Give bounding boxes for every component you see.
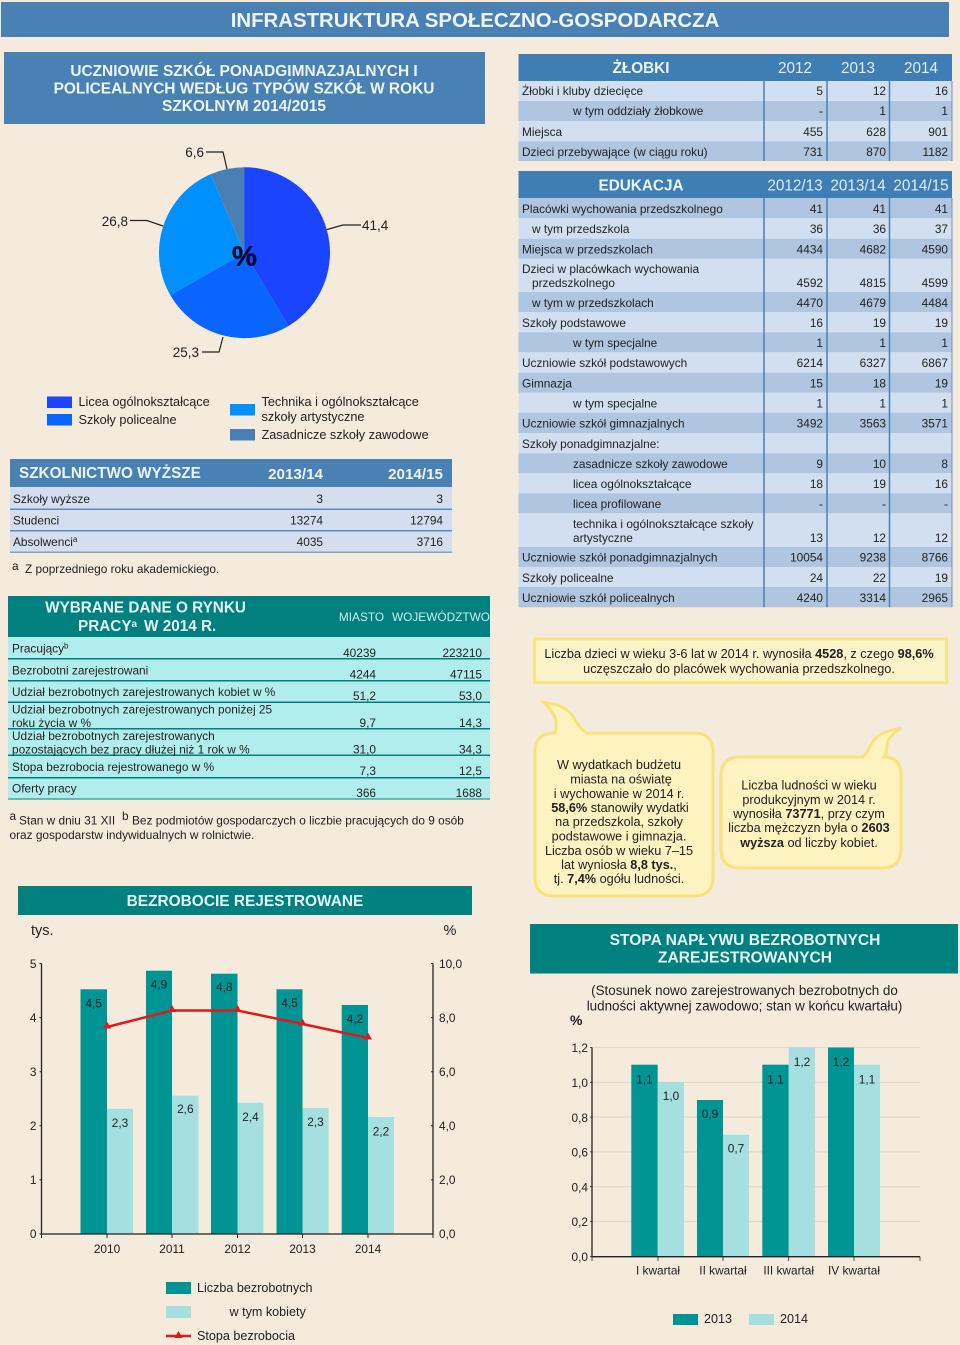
table: edukacja: zasadnicze szkoły zawodowe xyxy=(573,457,728,471)
table: edukacja: 6327 xyxy=(860,356,886,370)
chart: stopa napływu: 0,6 xyxy=(572,1146,588,1160)
table: edukacja: 4470 xyxy=(797,296,823,310)
table: edukacja: 1 xyxy=(816,396,823,410)
table: szkolnictwo wyższe: 3 xyxy=(316,492,323,506)
callout bubble: ludność w wieku produkcyjnym: wynosiła 73771, przy czym xyxy=(732,807,885,821)
table: żłobki xyxy=(518,54,952,161)
table: żłobki: 628 xyxy=(866,125,886,139)
footnote: szkolnictwo wyższe: a xyxy=(12,559,19,573)
table: szkolnictwo wyższe: 4035 xyxy=(297,535,323,549)
table: edukacja: 36 xyxy=(810,222,823,236)
table: edukacja: 18 xyxy=(810,477,823,491)
table: rynek pracy: 31,0 xyxy=(353,742,376,756)
chart: stopa napływu: I kwartał xyxy=(636,1264,680,1278)
table: żłobki: 5 xyxy=(816,84,823,98)
chart: bezrobocie rejestrowane: 2012 xyxy=(224,1242,251,1256)
chart: bezrobocie rejestrowane: 1 xyxy=(30,1173,37,1187)
table: edukacja: 18 xyxy=(873,376,886,390)
callout bubble: wydatki budżetu: na przedszkola, szkoły xyxy=(555,815,683,829)
table: edukacja: 2013/14 xyxy=(830,178,886,194)
table: żłobki: - xyxy=(819,104,823,118)
callout bubble: ludność w wieku produkcyjnym: produkcyjnym w 2014 r. xyxy=(742,793,876,807)
pie chart: typy szkół: 25,3 xyxy=(173,345,199,360)
table: edukacja: 9238 xyxy=(860,550,886,564)
callout bubble: ludność w wieku produkcyjnym: liczba mężczyzn była o 2603 xyxy=(728,821,890,835)
table: edukacja: 37 xyxy=(935,222,948,236)
heading: stopa napływu bezrobotnych xyxy=(530,924,958,974)
table: edukacja xyxy=(518,171,952,607)
legend: bezrobocie: Stopa bezrobocia xyxy=(197,1329,295,1343)
table: szkolnictwo wyższe: 3 xyxy=(436,492,443,506)
table: edukacja: 8 xyxy=(941,457,948,471)
table: rynek pracy: WYBRANE DANE O RYNKU xyxy=(45,600,246,616)
legend: bezrobocie: w tym kobiety xyxy=(228,1305,306,1319)
table: żłobki: 2014 xyxy=(904,60,939,77)
table: edukacja: 1 xyxy=(879,336,886,350)
chart: bezrobocie rejestrowane: 2,3 xyxy=(307,1115,324,1129)
table: edukacja: EDUKACJA xyxy=(598,178,684,194)
table: edukacja: 36 xyxy=(873,222,886,236)
table: edukacja: 6867 xyxy=(922,356,948,370)
callout bubble: wydatki budżetu: Liczba osób w wieku 7–15 xyxy=(545,844,693,858)
table: edukacja: 15 xyxy=(810,376,823,390)
table: rynek pracy: 51,2 xyxy=(353,689,376,703)
callout: liczba dzieci xyxy=(534,639,946,682)
table: edukacja: 3571 xyxy=(922,416,948,430)
legend: stopa napływu xyxy=(673,1312,808,1326)
chart: bezrobocie rejestrowane: 8,0 xyxy=(439,1011,456,1025)
table: edukacja: przedszkolnego xyxy=(532,276,615,290)
chart: bezrobocie rejestrowane: 3 xyxy=(30,1065,37,1079)
table: rynek pracy: 34,3 xyxy=(459,742,482,756)
table: edukacja: 6214 xyxy=(797,356,823,370)
table: żłobki: 870 xyxy=(866,145,886,159)
table: edukacja: 41 xyxy=(810,202,823,216)
table: rynek pracy: 40239 xyxy=(343,646,376,660)
footnote: rynek pracy: oraz gospodarstw indywidualnych w rolnictwie. xyxy=(10,828,254,842)
chart: stopa napływu: 1,1 xyxy=(859,1072,876,1086)
table: żłobki: 1 xyxy=(941,104,948,118)
table: edukacja: 41 xyxy=(935,202,948,216)
table: żłobki: Miejsca xyxy=(522,125,563,139)
table: edukacja: licea ogólnokształcące xyxy=(573,477,692,491)
table: edukacja: 4599 xyxy=(922,276,948,290)
table: edukacja: 1 xyxy=(879,396,886,410)
chart: stopa napływu: 1,2 xyxy=(794,1055,810,1069)
table: rynek pracy: b xyxy=(64,642,69,650)
chart: bezrobocie rejestrowane: 2013 xyxy=(289,1242,316,1256)
table: edukacja: - xyxy=(944,497,948,511)
footnote: rynek pracy xyxy=(10,809,464,842)
table: edukacja: 1 xyxy=(941,336,948,350)
table: edukacja: 4484 xyxy=(922,296,948,310)
table: edukacja: 2014/15 xyxy=(893,178,949,194)
table: edukacja: 22 xyxy=(873,571,886,585)
chart: stopa napływu: 0,8 xyxy=(572,1111,588,1125)
subtitle: stopa napływu xyxy=(587,983,902,1014)
subtitle: stopa napływu: ludności aktywnej zawodowo; stan w końcu kwartału) xyxy=(587,998,902,1014)
table: edukacja: Gimnazja xyxy=(522,376,572,390)
table: rynek pracy: Udział bezrobotnych zarejestrowanych kobiet w % xyxy=(12,685,276,699)
pie chart: typy szkół: 26,8 xyxy=(102,214,128,229)
table: edukacja: 3314 xyxy=(860,591,886,605)
panel: heading uczniowie szkół xyxy=(4,52,485,124)
table: edukacja: 19 xyxy=(873,316,886,330)
table: edukacja: 10054 xyxy=(790,550,823,564)
chart: stopa napływu: III kwartał xyxy=(763,1264,814,1278)
legend: typy szkół: szkoły artystyczne xyxy=(262,410,364,424)
chart: stopa napływu xyxy=(570,1012,920,1278)
footnote: rynek pracy: a xyxy=(10,809,16,823)
chart: bezrobocie rejestrowane: 2014 xyxy=(355,1242,382,1256)
table: rynek pracy: a xyxy=(132,619,138,630)
table: szkolnictwo wyższe: 13274 xyxy=(290,514,323,528)
table: rynek pracy: W 2014 R. xyxy=(144,618,216,635)
chart: stopa napływu: % xyxy=(570,1012,583,1028)
table: edukacja: 8766 xyxy=(922,550,948,564)
callout bubble: ludność w wieku produkcyjnym xyxy=(721,728,901,868)
table: edukacja: 24 xyxy=(810,571,823,585)
table: edukacja: - xyxy=(819,497,823,511)
chart: bezrobocie rejestrowane: 4,5 xyxy=(85,996,102,1010)
table: edukacja: Miejsca w przedszkolach xyxy=(522,242,653,256)
chart: bezrobocie rejestrowane: 2,4 xyxy=(242,1110,259,1124)
chart: bezrobocie rejestrowane: % xyxy=(444,923,457,939)
chart: stopa napływu: 1,2 xyxy=(572,1041,588,1055)
chart: bezrobocie rejestrowane: 10,0 xyxy=(439,957,462,971)
chart: stopa napływu: 0,0 xyxy=(572,1250,588,1264)
table: edukacja: Placówki wychowania przedszkolnego xyxy=(522,202,723,216)
table: rynek pracy: 7,3 xyxy=(360,764,376,778)
table: żłobki: 1182 xyxy=(923,145,948,159)
pie chart: typy szkół: 41,4 xyxy=(362,218,389,233)
chart: bezrobocie rejestrowane: tys. xyxy=(31,923,54,939)
table: rynek pracy xyxy=(8,596,490,800)
table: edukacja: 4592 xyxy=(797,276,823,290)
pie chart: typy szkół xyxy=(102,145,389,360)
chart: stopa napływu: 0,7 xyxy=(728,1142,744,1156)
callout bubble: wydatki budżetu: W wydatkach budżetu xyxy=(557,758,681,772)
chart: bezrobocie rejestrowane: 0 xyxy=(30,1227,37,1241)
table: rynek pracy: Udział bezrobotnych zarejestrowanych poniżej 25 xyxy=(12,702,272,716)
table: szkolnictwo wyższe: 2013/14 xyxy=(268,466,324,483)
table: rynek pracy: Pracujący xyxy=(12,642,64,656)
table: edukacja: technika i ogólnokształcące szkoły xyxy=(573,517,753,531)
table: rynek pracy: 47115 xyxy=(450,668,482,682)
heading: stopa napływu bezrobotnych: ZAREJESTROWANYCH xyxy=(658,950,832,966)
table: edukacja: 16 xyxy=(810,316,823,330)
title xyxy=(1,2,949,37)
table: rynek pracy: 223210 xyxy=(442,646,482,660)
table: edukacja: w tym przedszkola xyxy=(531,222,630,236)
table: edukacja: Uczniowie szkół podstawowych xyxy=(522,356,687,370)
callout bubble: wydatki budżetu: lat wyniosła 8,8 tys., xyxy=(561,858,677,872)
table: edukacja: 2965 xyxy=(922,591,948,605)
table: rynek pracy: roku życia w % xyxy=(12,716,91,730)
table: rynek pracy: 53,0 xyxy=(459,689,482,703)
chart: stopa napływu: 1,1 xyxy=(767,1072,784,1086)
footnote: rynek pracy: Stan w dniu 31 XII xyxy=(19,814,115,828)
callout: liczba dzieci: Liczba dzieci w wieku 3-6 lat w 2014 r. wynosiła 4528, z czego 98,6% xyxy=(544,647,934,661)
table: rynek pracy: PRACY xyxy=(78,618,132,635)
table: żłobki: Żłobki i kluby dziecięce xyxy=(522,84,644,98)
legend: typy szkół: Licea ogólnokształcące xyxy=(78,395,210,409)
table: edukacja: 2012/13 xyxy=(767,178,823,194)
legend: bezrobocie: Liczba bezrobotnych xyxy=(197,1281,313,1295)
table: edukacja: 4240 xyxy=(797,591,823,605)
table: edukacja: w tym specjalne xyxy=(572,336,658,350)
table: edukacja: - xyxy=(882,497,886,511)
chart: bezrobocie rejestrowane xyxy=(30,923,462,1256)
table: rynek pracy: 12,5 xyxy=(459,764,482,778)
table: edukacja: 1 xyxy=(816,336,823,350)
table: żłobki: w tym oddziały żłobkowe xyxy=(572,104,704,118)
legend: stopa napływu: 2014 xyxy=(780,1312,808,1326)
table: rynek pracy: Udział bezrobotnych zarejestrowanych xyxy=(12,729,215,743)
title: INFRASTRUKTURA SPOŁECZNO-GOSPODARCZA xyxy=(231,10,720,32)
table: edukacja: w tym w przedszkolach xyxy=(531,296,654,310)
table: edukacja: licea profilowane xyxy=(573,497,662,511)
table: szkolnictwo wyższe: Studenci xyxy=(13,514,59,528)
heading: bezrobocie rejestrowane xyxy=(18,886,472,915)
table: rynek pracy: 4244 xyxy=(350,668,376,682)
table: szkolnictwo wyższe: 2014/15 xyxy=(388,466,444,483)
chart: bezrobocie rejestrowane: 5 xyxy=(30,957,37,971)
table: edukacja: 4815 xyxy=(860,276,886,290)
table: rynek pracy: WOJEWÓDZTWO xyxy=(392,609,490,624)
chart: bezrobocie rejestrowane: 2010 xyxy=(94,1242,121,1256)
table: edukacja: Uczniowie szkół policealnych xyxy=(522,591,675,605)
table: rynek pracy: Bezrobotni zarejestrowani xyxy=(12,664,148,678)
panel: heading uczniowie szkół: SZKOLNYM 2014/2015 xyxy=(162,98,326,115)
table: edukacja: 12 xyxy=(935,531,948,545)
chart: stopa napływu: 1,0 xyxy=(663,1089,680,1103)
table: edukacja: 4434 xyxy=(797,242,823,256)
chart: bezrobocie rejestrowane: 4,5 xyxy=(281,996,298,1010)
chart: stopa napływu: 1,1 xyxy=(636,1072,653,1086)
table: edukacja: 19 xyxy=(873,477,886,491)
chart: stopa napływu: IV kwartał xyxy=(828,1264,880,1278)
callout bubble: wydatki budżetu: miasta na oświatę xyxy=(570,772,672,786)
chart: stopa napływu: II kwartał xyxy=(699,1264,747,1278)
table: edukacja: Szkoły ponadgimnazjalne: xyxy=(522,437,660,451)
table: edukacja: 13 xyxy=(810,531,823,545)
table: żłobki: 16 xyxy=(935,84,948,98)
legend: typy szkół xyxy=(47,395,429,442)
chart: stopa napływu: 0,4 xyxy=(572,1180,588,1194)
chart: bezrobocie rejestrowane: 2,3 xyxy=(112,1116,129,1130)
callout bubble: ludność w wieku produkcyjnym: Liczba ludności w wieku xyxy=(741,778,877,792)
table: szkolnictwo wyższe: 3716 xyxy=(417,535,443,549)
subtitle: stopa napływu: (Stosunek nowo zarejestrowanych bezrobotnych do xyxy=(591,983,898,998)
table: edukacja: 9 xyxy=(816,457,823,471)
chart: bezrobocie rejestrowane: 2 xyxy=(30,1119,36,1133)
chart: bezrobocie rejestrowane: 6,0 xyxy=(439,1065,456,1079)
table: rynek pracy: 366 xyxy=(356,786,376,800)
footnote: szkolnictwo wyższe: Z poprzedniego roku akademickiego. xyxy=(25,562,219,576)
table: szkolnictwo wyższe: a xyxy=(73,535,78,544)
table: rynek pracy: 1688 xyxy=(456,786,482,800)
callout bubble: wydatki budżetu: podstawowe i gimnazja. xyxy=(552,830,686,844)
table: edukacja: 4590 xyxy=(922,242,948,256)
table: edukacja: 10 xyxy=(873,457,886,471)
chart: stopa napływu: 1,2 xyxy=(833,1055,849,1069)
table: szkolnictwo wyższe xyxy=(10,459,452,553)
callout bubble: wydatki budżetu: 58,6% stanowiły wydatki xyxy=(551,801,689,815)
table: edukacja: 41 xyxy=(873,202,886,216)
chart: stopa napływu: 1,0 xyxy=(572,1076,588,1090)
table: rynek pracy: pozostających bez pracy dłużej niż 1 rok w % xyxy=(12,742,250,756)
pie chart: typy szkół: % xyxy=(232,240,257,272)
table: rynek pracy: 9,7 xyxy=(360,716,376,730)
chart: bezrobocie rejestrowane: 2,6 xyxy=(177,1102,194,1116)
table: rynek pracy: Stopa bezrobocia rejestrowanego w % xyxy=(12,760,215,774)
table: edukacja: 4679 xyxy=(860,296,886,310)
table: żłobki: 1 xyxy=(879,104,886,118)
table: rynek pracy: MIASTO xyxy=(339,610,384,624)
table: żłobki: 731 xyxy=(803,145,823,159)
table: edukacja: Szkoły podstawowe xyxy=(522,316,626,330)
table: edukacja: Szkoły policealne xyxy=(522,571,614,585)
heading: bezrobocie rejestrowane: BEZROBOCIE REJESTROWANE xyxy=(127,893,363,910)
legend: typy szkół: Szkoły policealne xyxy=(78,413,177,427)
table: edukacja: Uczniowie szkół ponadgimnazjalnych xyxy=(522,550,718,564)
chart: bezrobocie rejestrowane: 2,0 xyxy=(439,1173,456,1187)
table: żłobki: 12 xyxy=(873,84,886,98)
table: edukacja: 19 xyxy=(935,376,948,390)
chart: stopa napływu: 0,2 xyxy=(572,1215,588,1229)
panel: heading uczniowie szkół: UCZNIOWIE SZKÓŁ PONADGIMNAZJALNYCH I xyxy=(70,62,418,80)
table: żłobki: 2013 xyxy=(841,60,875,77)
footnote: rynek pracy: Bez podmiotów gospodarczych o liczbie pracujących do 9 osób xyxy=(132,814,464,828)
chart: bezrobocie rejestrowane: 4 xyxy=(30,1011,37,1025)
legend: typy szkół: Technika i ogólnokształcące xyxy=(262,395,419,409)
footnote: rynek pracy: b xyxy=(122,809,129,823)
panel: heading uczniowie szkół: POLICEALNYCH WEDŁUG TYPÓW SZKÓŁ W ROKU xyxy=(54,80,434,98)
table: szkolnictwo wyższe: SZKOLNICTWO WYŻSZE xyxy=(19,465,201,482)
table: żłobki: 901 xyxy=(928,125,948,139)
table: rynek pracy: 14,3 xyxy=(459,716,482,730)
callout bubble: wydatki budżetu: tj. 7,4% ogółu ludności. xyxy=(554,872,684,886)
table: szkolnictwo wyższe: 12794 xyxy=(410,514,443,528)
pie chart: typy szkół: 6,6 xyxy=(185,145,204,160)
table: żłobki: Dzieci przebywające (w ciągu roku) xyxy=(522,145,708,159)
table: edukacja: 12 xyxy=(873,531,886,545)
chart: bezrobocie rejestrowane: 4,0 xyxy=(439,1119,456,1133)
table: edukacja: w tym specjalne xyxy=(572,396,658,410)
table: żłobki: 455 xyxy=(803,125,823,139)
table: edukacja: 4682 xyxy=(860,242,886,256)
chart: bezrobocie rejestrowane: 4,8 xyxy=(216,980,233,994)
table: szkolnictwo wyższe: Absolwenci xyxy=(13,535,73,549)
table: edukacja: Uczniowie szkół gimnazjalnych xyxy=(522,416,685,430)
table: szkolnictwo wyższe: Szkoły wyższe xyxy=(13,492,90,506)
table: edukacja: 19 xyxy=(935,571,948,585)
table: edukacja: 16 xyxy=(935,477,948,491)
chart: stopa napływu: 0,9 xyxy=(702,1107,719,1121)
table: edukacja: 19 xyxy=(935,316,948,330)
table: edukacja: Dzieci w placówkach wychowania xyxy=(522,262,699,276)
chart: bezrobocie rejestrowane: 0,0 xyxy=(439,1227,456,1241)
chart: bezrobocie rejestrowane: 4,2 xyxy=(347,1012,363,1026)
table: edukacja: 1 xyxy=(941,396,948,410)
legend: stopa napływu: 2013 xyxy=(704,1312,732,1326)
legend: typy szkół: Zasadnicze szkoły zawodowe xyxy=(262,428,429,442)
table: edukacja: 3563 xyxy=(860,416,886,430)
chart: bezrobocie rejestrowane: 2,2 xyxy=(373,1124,389,1138)
callout: liczba dzieci: uczęszczało do placówek wychowania przedszkolnego. xyxy=(583,662,895,676)
heading: stopa napływu bezrobotnych: STOPA NAPŁYWU BEZROBOTNYCH xyxy=(610,932,880,949)
chart: bezrobocie rejestrowane: 2011 xyxy=(159,1242,185,1256)
table: edukacja: artystyczne xyxy=(573,531,633,545)
callout bubble: wydatki budżetu xyxy=(535,702,713,896)
callout bubble: wydatki budżetu: i wychowanie w 2014 r. xyxy=(554,787,684,801)
table: żłobki: 2012 xyxy=(778,60,812,77)
chart: bezrobocie rejestrowane: 4,9 xyxy=(151,978,168,992)
table: żłobki: ŻŁOBKI xyxy=(613,60,669,77)
table: edukacja: 3492 xyxy=(797,416,823,430)
legend: bezrobocie xyxy=(166,1281,313,1343)
callout bubble: ludność w wieku produkcyjnym: wyższa od liczby kobiet. xyxy=(739,836,878,850)
table: rynek pracy: Oferty pracy xyxy=(12,782,77,796)
